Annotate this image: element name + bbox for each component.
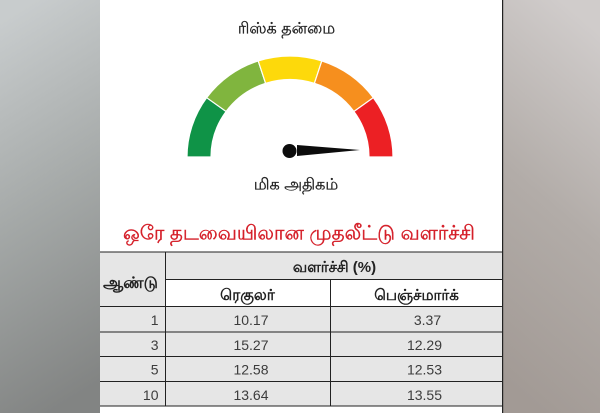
gauge segment: red [354, 98, 393, 157]
left background panel [0, 0, 100, 413]
table row: year 10: 10 [143, 387, 159, 403]
table row: year 1 [151, 312, 441, 328]
table shaded cells [100, 252, 502, 406]
table row: year 3: 15.27 [233, 337, 269, 353]
table row: year 5: 5 [151, 362, 159, 378]
gauge needle [282, 144, 360, 158]
table row: year 3: 12.29 [407, 337, 442, 353]
table row: year 5: 12.58 [233, 362, 269, 378]
table title: ஒரே தடவையிலான முதலீட்டு வளர்ச்சி [123, 222, 475, 246]
gauge segment: light green [207, 61, 266, 111]
growth table [100, 252, 503, 406]
table row: year 1: 3.37 [414, 312, 441, 328]
gauge value label: மிக அதிகம் [254, 176, 338, 194]
right panel border [502, 0, 503, 413]
table row: year 10 [143, 387, 442, 403]
table row: year 5: 12.53 [407, 362, 442, 378]
gauge segment: yellow [258, 56, 322, 83]
table row: year 1: 10.17 [233, 312, 269, 328]
table grid lines [100, 252, 503, 406]
table row: year 10: 13.55 [407, 387, 442, 403]
table row: year 3: 3 [151, 337, 159, 353]
table header: benchmark: பெஞ்ச்மார்க் [374, 287, 459, 305]
table header: growth percent: வளர்ச்சி (%) [293, 259, 376, 276]
gauge segment: orange [314, 61, 373, 111]
table row: year 5 [151, 362, 442, 378]
gauge title: ரிஸ்க் தன்மை [238, 20, 335, 38]
table row: year 10: 13.64 [233, 387, 269, 403]
gauge segment: dark green [187, 98, 226, 157]
right background panel [503, 0, 600, 413]
table row: year 3 [151, 337, 442, 353]
risk gauge [187, 56, 393, 157]
table header: year: ஆண்டு [103, 275, 158, 293]
table header: regular: ரெகுலர் [220, 287, 276, 306]
table row: year 1: 1 [151, 312, 159, 328]
